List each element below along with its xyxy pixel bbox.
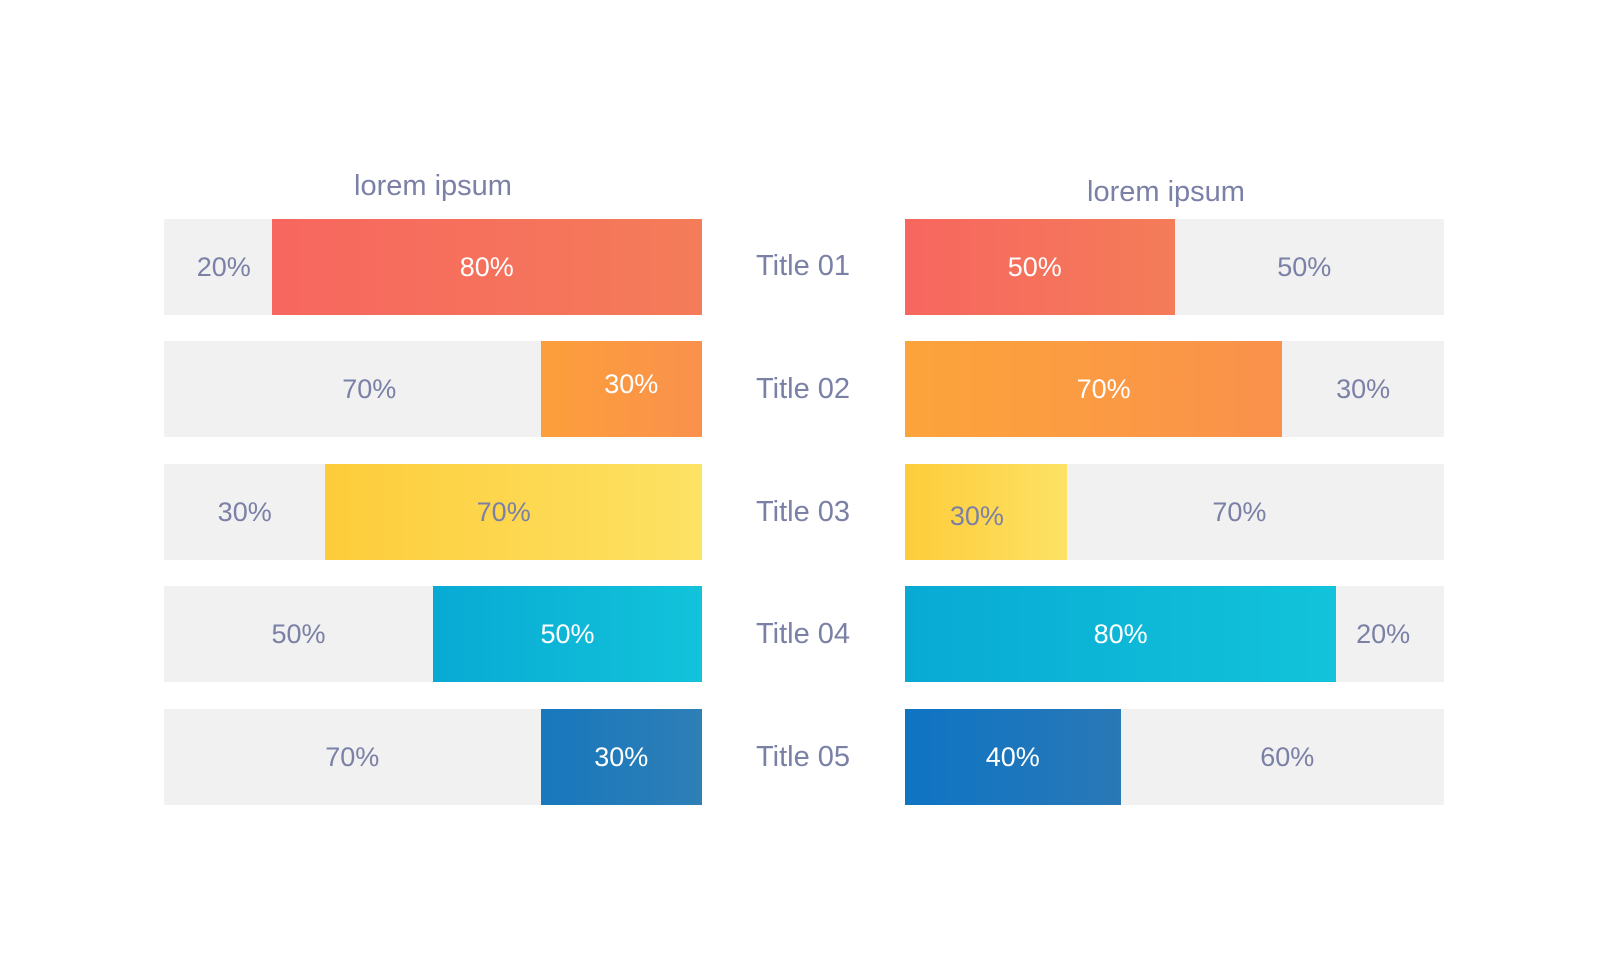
title 03: Title 03 [756, 496, 850, 528]
left bar row 4: 50% [540, 618, 595, 648]
title 05: Title 05 [756, 741, 850, 773]
right bar row 2: 30% [1336, 374, 1390, 404]
right bar row 3 [905, 464, 1444, 560]
header: left: lorem ipsum [354, 170, 512, 202]
right bar row 5: 60% [1260, 742, 1314, 772]
right bar row 1: 50% [1277, 252, 1331, 282]
left bar row 2: 30% [604, 368, 658, 398]
left bar row 3: 30% [218, 496, 272, 526]
left bar row 1 [164, 219, 702, 315]
left bar row 2: 70% [342, 374, 396, 404]
left bar row 4 [164, 586, 702, 682]
left bar row 1: 20% [197, 252, 251, 282]
right bar row 3: 70% [1212, 496, 1266, 526]
left bar row 5: 70% [325, 742, 379, 772]
left bar row 5: 30% [594, 742, 648, 772]
right bar row 5: 40% [986, 742, 1040, 772]
right bar row 4 [905, 586, 1444, 682]
right bar row 1 [905, 219, 1444, 315]
left bar row 1: 80% [460, 252, 514, 282]
right bar row 3: 30% [950, 500, 1004, 530]
right bar row 5 [905, 709, 1444, 805]
left bar row 2 [164, 341, 702, 437]
title 01: Title 01 [756, 250, 850, 282]
right bar row 4: 80% [1094, 618, 1148, 648]
right bar row 2 [905, 341, 1444, 437]
header: right: lorem ipsum [1087, 176, 1245, 208]
left bar row 4: 50% [271, 618, 326, 648]
right bar row 2: 70% [1077, 374, 1131, 404]
right bar row 1: 50% [1008, 252, 1062, 282]
title 02: Title 02 [756, 373, 850, 405]
title 04: Title 04 [756, 618, 850, 650]
right bar row 4: 20% [1356, 618, 1410, 648]
left bar row 3: 70% [477, 496, 531, 526]
left bar row 5 [164, 709, 702, 805]
left bar row 3 [164, 464, 702, 560]
